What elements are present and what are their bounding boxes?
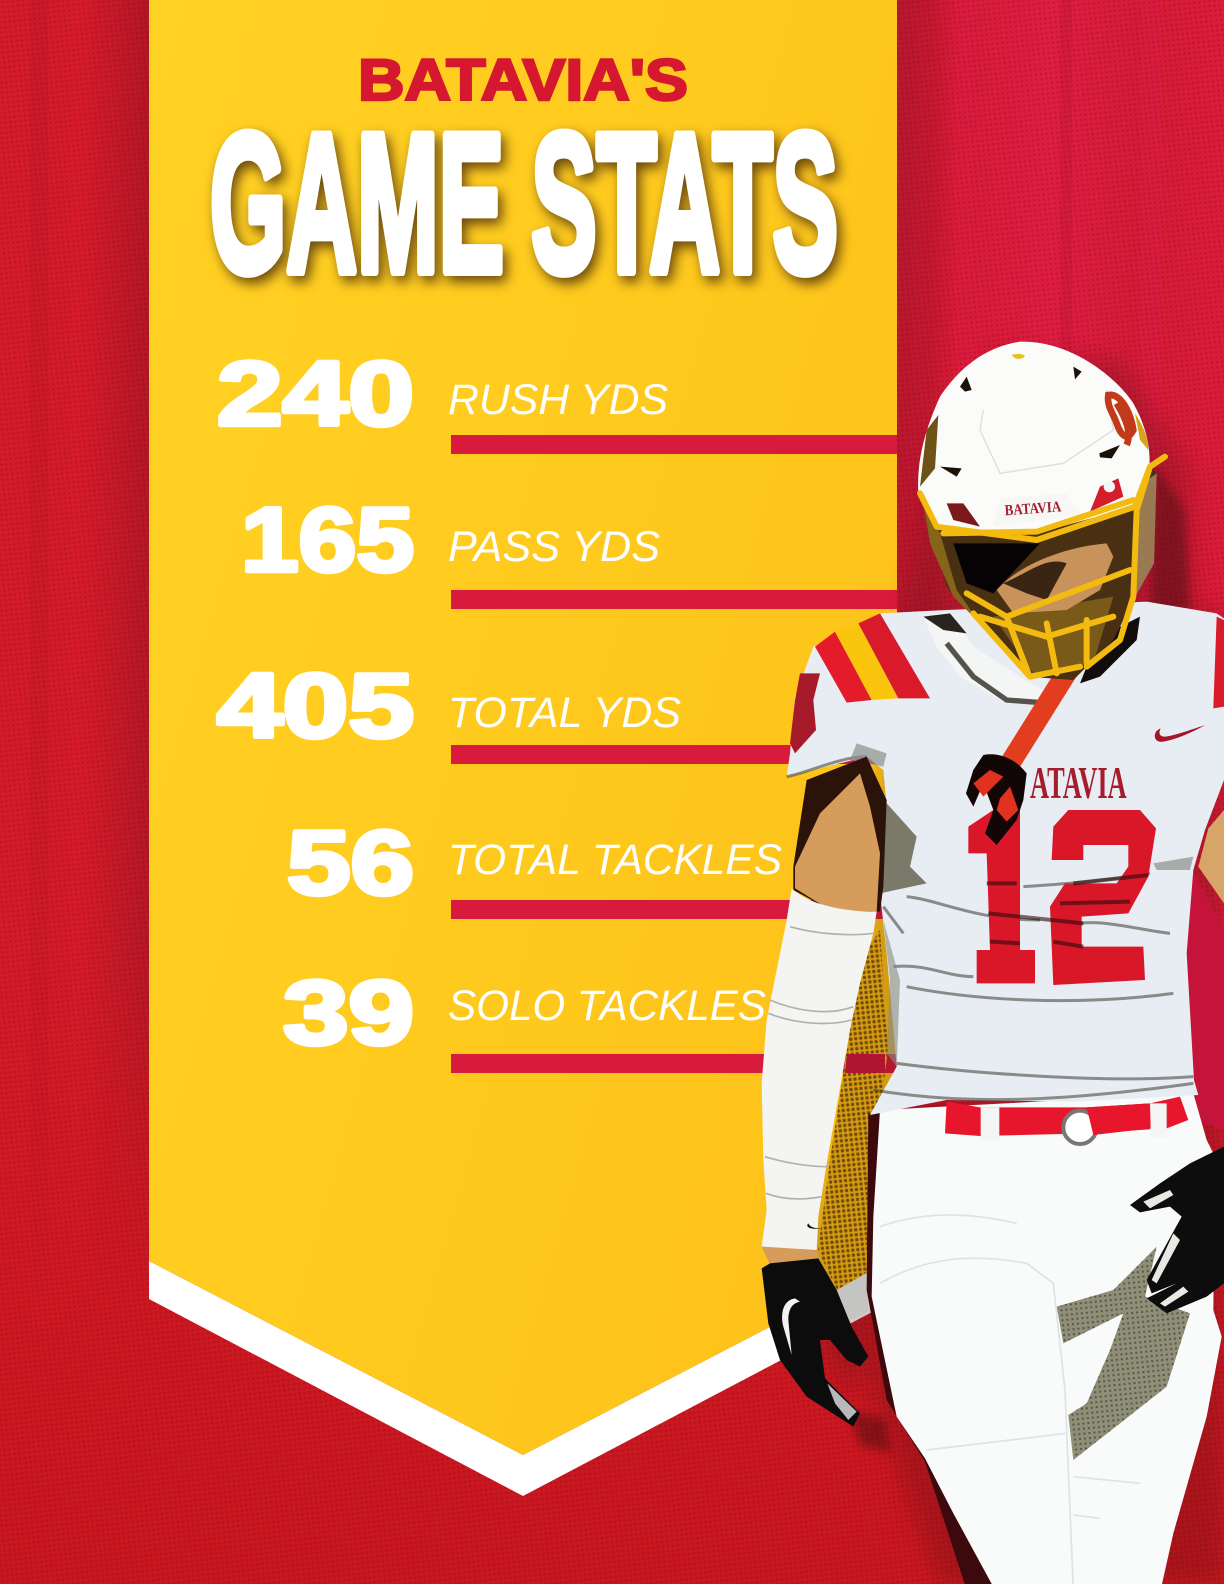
label: rush yds: RUSH YDS <box>448 376 668 424</box>
left hand <box>762 1247 868 1427</box>
sleeve swoosh <box>807 1223 822 1229</box>
number: 240: 240 <box>217 344 414 445</box>
face skin <box>997 543 1113 613</box>
banner <box>149 0 897 1496</box>
wrist skin <box>762 1247 820 1265</box>
belt buckle <box>1063 1111 1097 1144</box>
left arm <box>762 757 887 1250</box>
pants <box>867 1093 1222 1584</box>
towel strap <box>1010 670 1068 763</box>
stat row: total yards <box>217 656 897 764</box>
jersey number 1 <box>968 810 1035 983</box>
shoulder stripe red right <box>858 613 930 698</box>
glove <box>762 1258 868 1427</box>
helmet side shadow <box>920 415 938 487</box>
number: 56: 56 <box>287 813 414 914</box>
nike swoosh chest <box>1155 725 1205 742</box>
helmet shell <box>918 342 1150 533</box>
helmet pad red left <box>947 503 980 527</box>
upper arm skin <box>795 773 880 912</box>
shoulder stripe far side <box>1213 617 1224 708</box>
divider bar <box>451 435 897 454</box>
helmet panel line <box>980 390 1113 473</box>
helmet and facemask <box>918 342 1165 680</box>
jersey wordmark: ATAVIA <box>1030 757 1127 808</box>
divider bar <box>451 1054 897 1073</box>
label: pass yds: PASS YDS <box>448 523 660 571</box>
right hand glove <box>1130 1147 1224 1313</box>
player illustration <box>762 342 1224 1584</box>
cheek pad left <box>923 503 980 623</box>
leg shading <box>1057 1247 1190 1460</box>
upper arm shadow <box>793 757 887 912</box>
label: total tackles: TOTAL TACKLES <box>448 836 782 884</box>
belt loops <box>981 1103 1167 1141</box>
helmet pad red right <box>1090 478 1123 512</box>
nameplate text: BATAVIA <box>1004 498 1062 519</box>
compression sleeve <box>762 888 877 1250</box>
jersey number 2 <box>1050 810 1156 985</box>
banner white chevron edge <box>149 1261 897 1496</box>
number: 39: 39 <box>283 963 414 1064</box>
label: solo tackles: SOLO TACKLES <box>448 982 766 1030</box>
heading: Batavia's: BATAVIA'S <box>358 48 688 113</box>
jersey <box>787 602 1224 1115</box>
stat row: pass yards <box>241 490 897 609</box>
divider bar <box>451 745 897 764</box>
face cavity <box>927 467 1157 680</box>
jersey body <box>787 602 1224 1115</box>
jersey shading <box>880 803 927 893</box>
belt <box>945 1097 1188 1136</box>
stat row: solo tackles <box>283 963 897 1073</box>
banner yellow body <box>149 0 897 1455</box>
chin guard tint <box>993 597 1113 673</box>
cheek pad right <box>1133 473 1157 600</box>
stat row: total tackles <box>287 813 897 919</box>
divider bar <box>451 900 897 919</box>
shoulder stripe yellow <box>835 623 898 700</box>
player drop shadow <box>790 350 1224 1584</box>
helmet logo <box>1108 395 1148 450</box>
label: total yds: TOTAL YDS <box>448 689 681 737</box>
face black shadow <box>953 543 1040 593</box>
glove swoosh <box>782 1298 800 1355</box>
pants white <box>872 1093 1222 1584</box>
helmet vents <box>940 367 1120 477</box>
number: 405: 405 <box>217 656 414 757</box>
undershirt collar <box>923 612 1060 703</box>
number: 165: 165 <box>241 490 414 591</box>
facemask <box>920 457 1165 677</box>
divider bar <box>451 590 897 609</box>
sleeve number fragment <box>790 673 820 753</box>
stat row: rush yards <box>217 344 897 454</box>
pants outer shadow <box>867 1113 998 1584</box>
right forearm skin <box>1198 810 1224 903</box>
shoulder stripe red left <box>815 632 872 703</box>
helmet nameplate <box>993 493 1082 527</box>
collar dark right <box>1080 617 1140 683</box>
towel knot <box>966 754 1027 845</box>
